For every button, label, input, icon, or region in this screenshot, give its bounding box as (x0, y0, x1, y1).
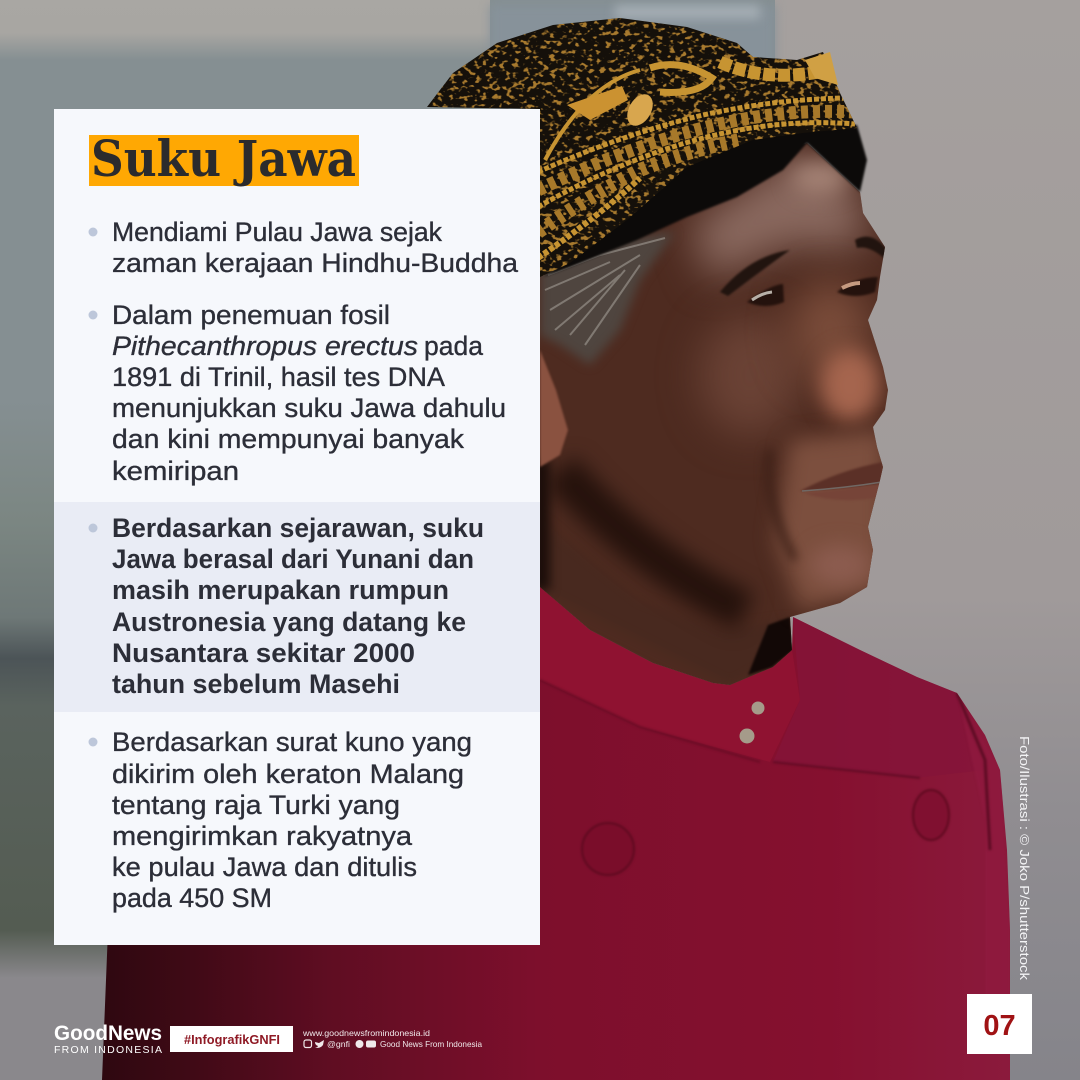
photo credit: Foto/Ilustrasi : © Joko P/shutterstock (1017, 736, 1032, 981)
logo: GoodNews From Indonesia: FROM INDONESIA (54, 1044, 162, 1056)
hashtag badge (170, 1026, 293, 1052)
bullet 1 (88, 217, 519, 278)
bullet 4: tentang raja Turki yang (112, 790, 400, 820)
bullet 3 (bold): Jawa berasal dari Yunani dan (112, 544, 474, 574)
ear (540, 350, 568, 467)
title highlight (89, 135, 359, 186)
icon: instagram (304, 1040, 312, 1048)
bullet 2: Dalam penemuan fosil (112, 300, 390, 330)
shirt (102, 580, 1010, 1080)
bullet 4: pada 450 SM (112, 883, 272, 913)
page number box: 07 (983, 1010, 1016, 1042)
footer links and social icons (302, 1028, 482, 1049)
icon: facebook (356, 1040, 364, 1048)
panel: highlighted row (54, 502, 540, 712)
bullet 3 (bold): Berdasarkan sejarawan, suku (112, 513, 484, 543)
bullet 4: Berdasarkan surat kuno yang (112, 727, 472, 757)
neck and face (540, 143, 888, 685)
mouth area and chin (775, 430, 885, 610)
jaw shadow (560, 470, 745, 612)
bullet 4 (88, 727, 472, 913)
bullet 1: Mendiami Pulau Jawa sejak (112, 217, 442, 247)
eyes (747, 284, 784, 306)
bullet 3 (bold): masih merupakan rumpun (112, 575, 449, 605)
bullet 3 (bold): Austronesia yang datang ke (112, 607, 466, 637)
headwrap batik (427, 18, 857, 277)
bullet 2: kemiripan (112, 456, 239, 486)
footer links and social icons: Good News From Indonesia (380, 1039, 482, 1049)
batik gold ornament (538, 62, 855, 258)
bullet 3 (bold): tahun sebelum Masehi (112, 669, 400, 699)
footer links and social icons: www.goodnewsfromindonesia.id (302, 1028, 430, 1038)
bullet 4: dikirim oleh keraton Malang (112, 759, 464, 789)
bullet 2 (88, 300, 506, 486)
bullet 2: dan kini mempunyai banyak (112, 424, 465, 454)
shirt buttons (582, 702, 949, 875)
neck tone (790, 627, 792, 646)
bullet 3 (bold): Nusantara sekitar 2000 (112, 638, 415, 668)
cheek (700, 315, 800, 435)
hashtag badge: #InfografikGNFI (184, 1033, 280, 1047)
bullet 4: mengirimkan rakyatnya (112, 821, 413, 851)
bullet 2: menunjukkan suku Jawa dahulu (112, 393, 506, 423)
logo: GoodNews From Indonesia: GoodNews (54, 1022, 162, 1045)
logo: GoodNews From Indonesia (54, 1022, 162, 1056)
bullet 2: Pithecanthropus erectus (112, 331, 418, 361)
panel: text card (54, 109, 540, 945)
icon: youtube (366, 1040, 376, 1048)
page number box (967, 994, 1032, 1054)
bullet 2: 1891 di Trinil, hasil tes DNA (112, 362, 445, 392)
headwrap black band (543, 125, 867, 277)
icon: twitter (315, 1040, 324, 1048)
mouth (800, 462, 883, 491)
bullet 4: ke pulau Jawa dan ditulis (112, 852, 417, 882)
bullet 3 (bold) (88, 513, 484, 699)
footer links and social icons: @gnfi (327, 1039, 350, 1049)
hair (540, 232, 675, 365)
title: Suku Jawa (91, 129, 356, 188)
bullet 1: zaman kerajaan Hindhu-Buddha (112, 248, 519, 278)
forehead (690, 150, 865, 280)
nose (820, 349, 880, 421)
eyebrows (720, 250, 790, 296)
bullet 2: pada (424, 331, 484, 361)
